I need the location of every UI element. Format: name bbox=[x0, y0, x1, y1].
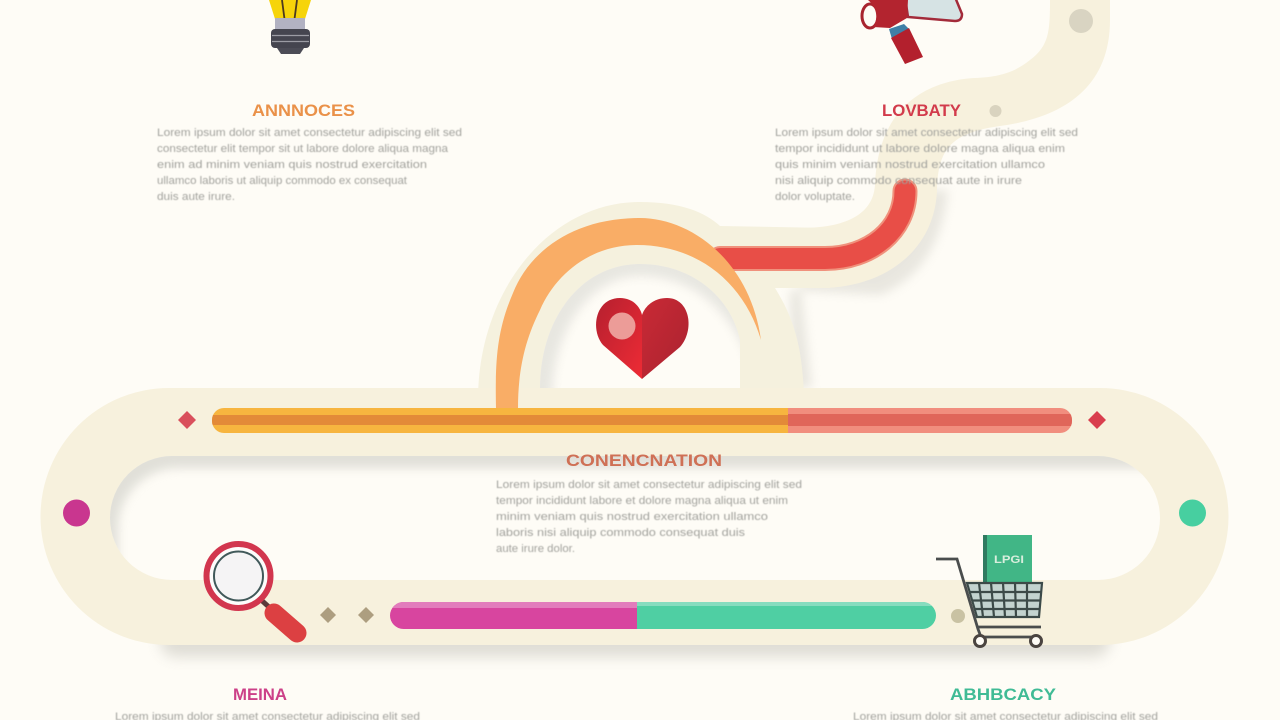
icon: megaphone bbox=[862, 0, 962, 64]
block: media bbox=[115, 685, 420, 720]
stage markers bbox=[63, 9, 1206, 623]
inner shadows bbox=[540, 264, 740, 388]
body text: consectetur elit tempor sit ut labore dolore aliqua magna bbox=[157, 143, 449, 155]
body text bbox=[496, 479, 802, 555]
marker: bottom diamonds bbox=[320, 607, 374, 623]
body text bbox=[157, 127, 462, 203]
cart basket bbox=[967, 583, 1042, 617]
body text: minim veniam quis nostrud exercitation ullamco bbox=[496, 511, 768, 523]
icon: heart bbox=[596, 298, 689, 379]
block: awareness bbox=[157, 101, 462, 203]
bottom progress bar bbox=[390, 602, 936, 629]
body text: Lorem ipsum dolor sit amet consectetur adipiscing elit sed bbox=[775, 127, 1078, 139]
body text: ullamco laboris ut aliquip commodo ex consequat bbox=[157, 175, 407, 187]
marker: pink dot bbox=[63, 500, 90, 526]
marker: green dot bbox=[1179, 500, 1206, 526]
marker: top right diamond bbox=[1088, 411, 1106, 429]
main loop bbox=[40, 388, 1228, 645]
body text: dolor voluptate. bbox=[775, 191, 855, 203]
marker: dot beside cart bbox=[951, 609, 965, 623]
cart wheels bbox=[974, 636, 1042, 646]
icon: shopping cart bbox=[936, 535, 1042, 646]
body text: Lorem ipsum dolor sit amet consectetur adipiscing elit sed bbox=[157, 127, 462, 139]
body text bbox=[775, 127, 1078, 203]
heading: CONENCNATION bbox=[566, 451, 722, 470]
heading: LOVBATY bbox=[882, 101, 962, 120]
cart product box: LPGI bbox=[994, 554, 1024, 566]
top progress bar bbox=[212, 408, 1072, 433]
icon: magnifying glass bbox=[206, 544, 297, 633]
block: consideration bbox=[496, 451, 802, 555]
body text: tempor incididunt ut labore dolore magna aliqua enim bbox=[775, 143, 1065, 155]
arch body bbox=[478, 202, 830, 400]
body text: Lorem ipsum dolor sit amet consectetur adipiscing elit sed bbox=[496, 479, 802, 491]
marker: small ribbon dot bbox=[990, 105, 1002, 117]
icon: light bulb bbox=[269, 0, 311, 54]
block: advocacy bbox=[853, 685, 1158, 720]
body text: tempor incididunt labore et dolore magna aliqua ut enim bbox=[496, 495, 788, 507]
arch opening bbox=[540, 264, 740, 388]
body text: laboris nisi aliquip commodo consequat duis bbox=[496, 527, 746, 539]
body text: aute irure dolor. bbox=[496, 543, 575, 555]
body text: enim ad minim veniam quis nostrud exercitation bbox=[157, 159, 427, 171]
heading: MEINA bbox=[233, 685, 287, 704]
block: loyalty bbox=[775, 101, 1078, 203]
body text: duis aute irure. bbox=[157, 191, 235, 203]
heading: ABHBCACY bbox=[950, 685, 1057, 704]
track shadows bbox=[160, 190, 1110, 657]
body text: quis minim veniam nostrud exercitation ullamco bbox=[775, 159, 1045, 171]
marker: upper ribbon dot bbox=[1069, 9, 1093, 33]
heading: ANNNOCES bbox=[252, 101, 355, 120]
marker: top left diamond bbox=[178, 411, 196, 429]
cart frame bbox=[936, 559, 1041, 637]
S-curve ribbon bbox=[700, 0, 1110, 288]
red loyalty stage ribbon bbox=[720, 191, 905, 258]
body text: nisi aliquip commodo consequat aute in irure bbox=[775, 175, 1022, 187]
orange arch ribbon bbox=[496, 218, 761, 408]
